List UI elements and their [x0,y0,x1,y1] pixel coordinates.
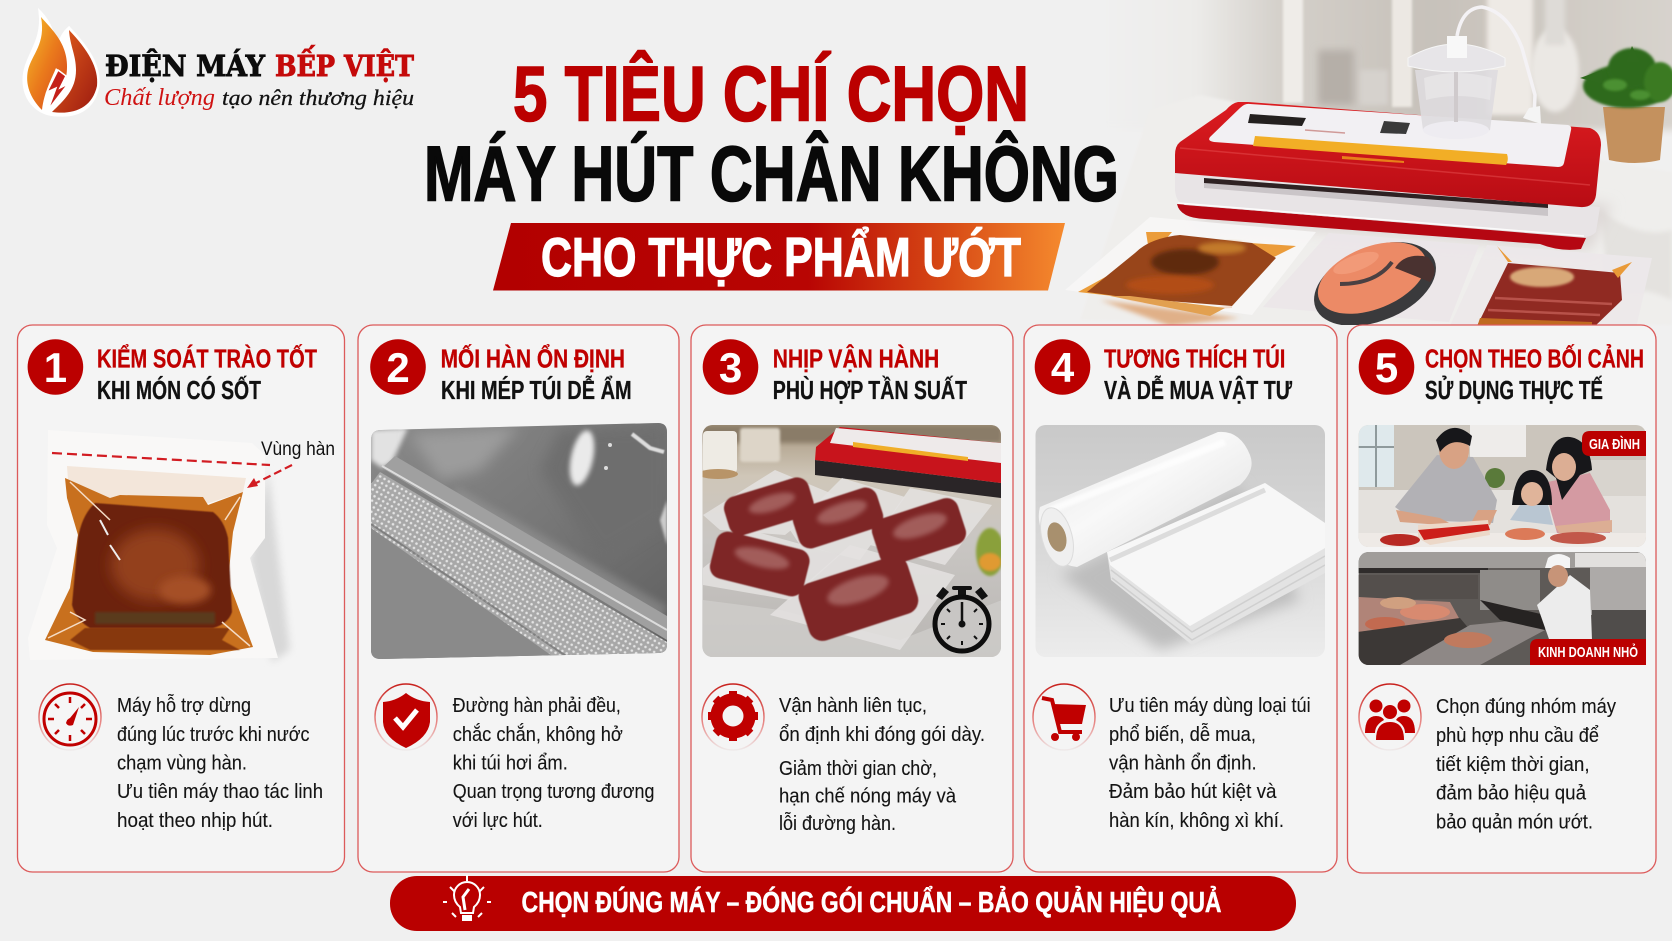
beef slab [1476,263,1622,328]
vacuum sealer machine [1175,102,1612,250]
title [424,50,1119,290]
description 5: tiết kiệm thời gian, [1436,753,1590,776]
panel 3: nhịp vận hành [691,325,1013,872]
icon: gauge [39,684,101,750]
label: kinh doanh nhỏ [1530,639,1646,665]
heading 3 [773,344,967,405]
number badge 3: 3 [719,344,742,391]
number badge 2 [370,339,426,395]
sealed bags with meat and salmon [1078,217,1652,325]
packs [703,470,992,650]
description 3: ổn định khi đóng gói dày. [779,723,985,746]
description 3: hạn chế nóng máy và [779,784,957,808]
table and machine [1358,533,1646,547]
heading 5 [1425,344,1644,405]
description 3: Vận hành liên tục, [779,694,927,717]
logo slogan red: Chất lượng [104,85,215,111]
panel 5: bối cảnh sử dụng [1348,325,1656,873]
heading 4: TƯƠNG THÍCH TÚI [1104,344,1285,374]
icon: lightbulb [443,875,491,921]
description 1: đúng lúc trước khi nước [117,723,310,746]
plant and pot [1580,46,1672,163]
icon: gear [702,684,764,750]
photo: sealed bag with sauce [28,430,292,662]
description 5: phù hợp nhu cầu để [1436,724,1599,747]
title line 2: MÁY HÚT CHÂN KHÔNG [424,130,1119,218]
heading 2 [441,344,632,405]
icon: people [1359,684,1421,750]
icon: cart [1033,684,1095,750]
logo slogan black: tạo nên thương hiệu [222,85,414,110]
photo: bag roll and stack [1035,425,1325,657]
salmon steak [1314,242,1436,325]
heading 3: NHỊP VẬN HÀNH [773,344,939,374]
description 3: Giảm thời gian chờ, [779,757,937,780]
heading 3: PHÙ HỢP TẦN SUẤT [773,375,967,405]
number badge 2: 2 [386,344,410,391]
chef [1537,575,1592,642]
description 5: đảm bảo hiệu quả [1436,782,1587,804]
heading 1: KIỂM SOÁT TRÀO TỐT [97,344,317,374]
description 4: phổ biến, dễ mua, [1109,723,1256,746]
description 1: chạm vùng hàn. [117,752,247,774]
description 4: vận hành ổn định. [1109,752,1257,774]
description 2 [453,694,654,832]
child [1510,505,1553,525]
number badge 4 [1035,339,1090,395]
label: gia đình [1582,431,1646,456]
description 1: Ưu tiên máy thao tác linh [117,780,323,803]
description 4: Ưu tiên máy dùng loại túi [1109,694,1311,717]
man [1395,455,1497,523]
description 1: Máy hỗ trợ dừng [117,694,251,717]
hero photo: vacuum sealer and sealed food bags [1065,0,1672,342]
logo [24,12,414,115]
panel 1: kiểm soát trào [18,325,344,872]
bottom banner [390,875,1296,931]
heading 1: KHI MÓN CÓ SỐT [97,375,261,405]
description 5: Chọn đúng nhóm máy [1436,695,1617,718]
photo: small business kitchen [1358,552,1647,665]
icon: flame [24,12,98,115]
description 5: bảo quản món ướt. [1436,810,1593,834]
banner slogan: CHỌN ĐÚNG MÁY – ĐÓNG GÓI CHUẨN – BẢO QUẢN HIỆU QUẢ [522,885,1222,919]
title line 1: 5 TIÊU CHÍ CHỌN [513,50,1029,138]
number badge 1: 1 [44,344,67,391]
marble counter [1080,95,1672,325]
description 2: chắc chắn, không hở [453,723,623,746]
description 4 [1109,694,1311,832]
description 4: hàn kín, không xì khí. [1109,809,1284,832]
number badge 5: 5 [1375,344,1398,391]
description 2: Đường hàn phải đều, [453,694,621,717]
description 2: Quan trọng tương đương [453,780,654,803]
photo: close-up of seal [365,420,670,665]
logo wordmark red: BẾP VIỆT [275,44,414,83]
photo: many sealed meat packs [698,425,1004,657]
panel 2: mối hàn [358,325,679,872]
heading 4 [1104,344,1292,405]
heading 2: MỐI HÀN ỔN ĐỊNH [441,344,625,374]
subtitle banner: CHO THỰC PHẨM ƯỚT [541,227,1021,288]
canister and tube [1408,7,1541,139]
description 4: Đảm bảo hút kiệt và [1109,780,1277,803]
heading 1 [97,344,317,405]
seal zone label: Vùng hàn [261,439,335,460]
seal zone dashed line [52,453,270,465]
number badge 3 [703,339,758,395]
heading 2: KHI MÉP TÚI DỄ ẨM [441,375,632,405]
description 1: hoạt theo nhịp hút. [117,809,273,832]
label: gia đình: GIA ĐÌNH [1589,436,1640,453]
photo: family kitchen [1358,425,1648,549]
logo wordmark: ĐIỆN MÁY [105,48,265,83]
description 1 [117,694,323,832]
heading 5: SỬ DỤNG THỰC TẾ [1425,374,1603,405]
label: kinh doanh nhỏ: KINH DOANH NHỎ [1538,643,1638,661]
icon: stopwatch [935,586,989,651]
number badge 5 [1359,339,1414,395]
heading 4: VÀ DỄ MUA VẬT TƯ [1104,375,1292,405]
panel 4: tương thích túi [1024,325,1337,872]
description 3: lỗi đường hàn. [779,812,896,835]
arrow to seal zone [247,465,292,488]
woman [1548,473,1610,533]
description 2: với lực hút. [453,809,543,832]
number badge 4: 4 [1051,344,1075,391]
description 5 [1436,695,1617,834]
orange sauce corners [1078,232,1296,298]
icon: shield [375,684,437,750]
description 2: khi túi hơi ẩm. [453,752,568,774]
description 3 [779,694,985,835]
number badge 1 [28,339,83,395]
